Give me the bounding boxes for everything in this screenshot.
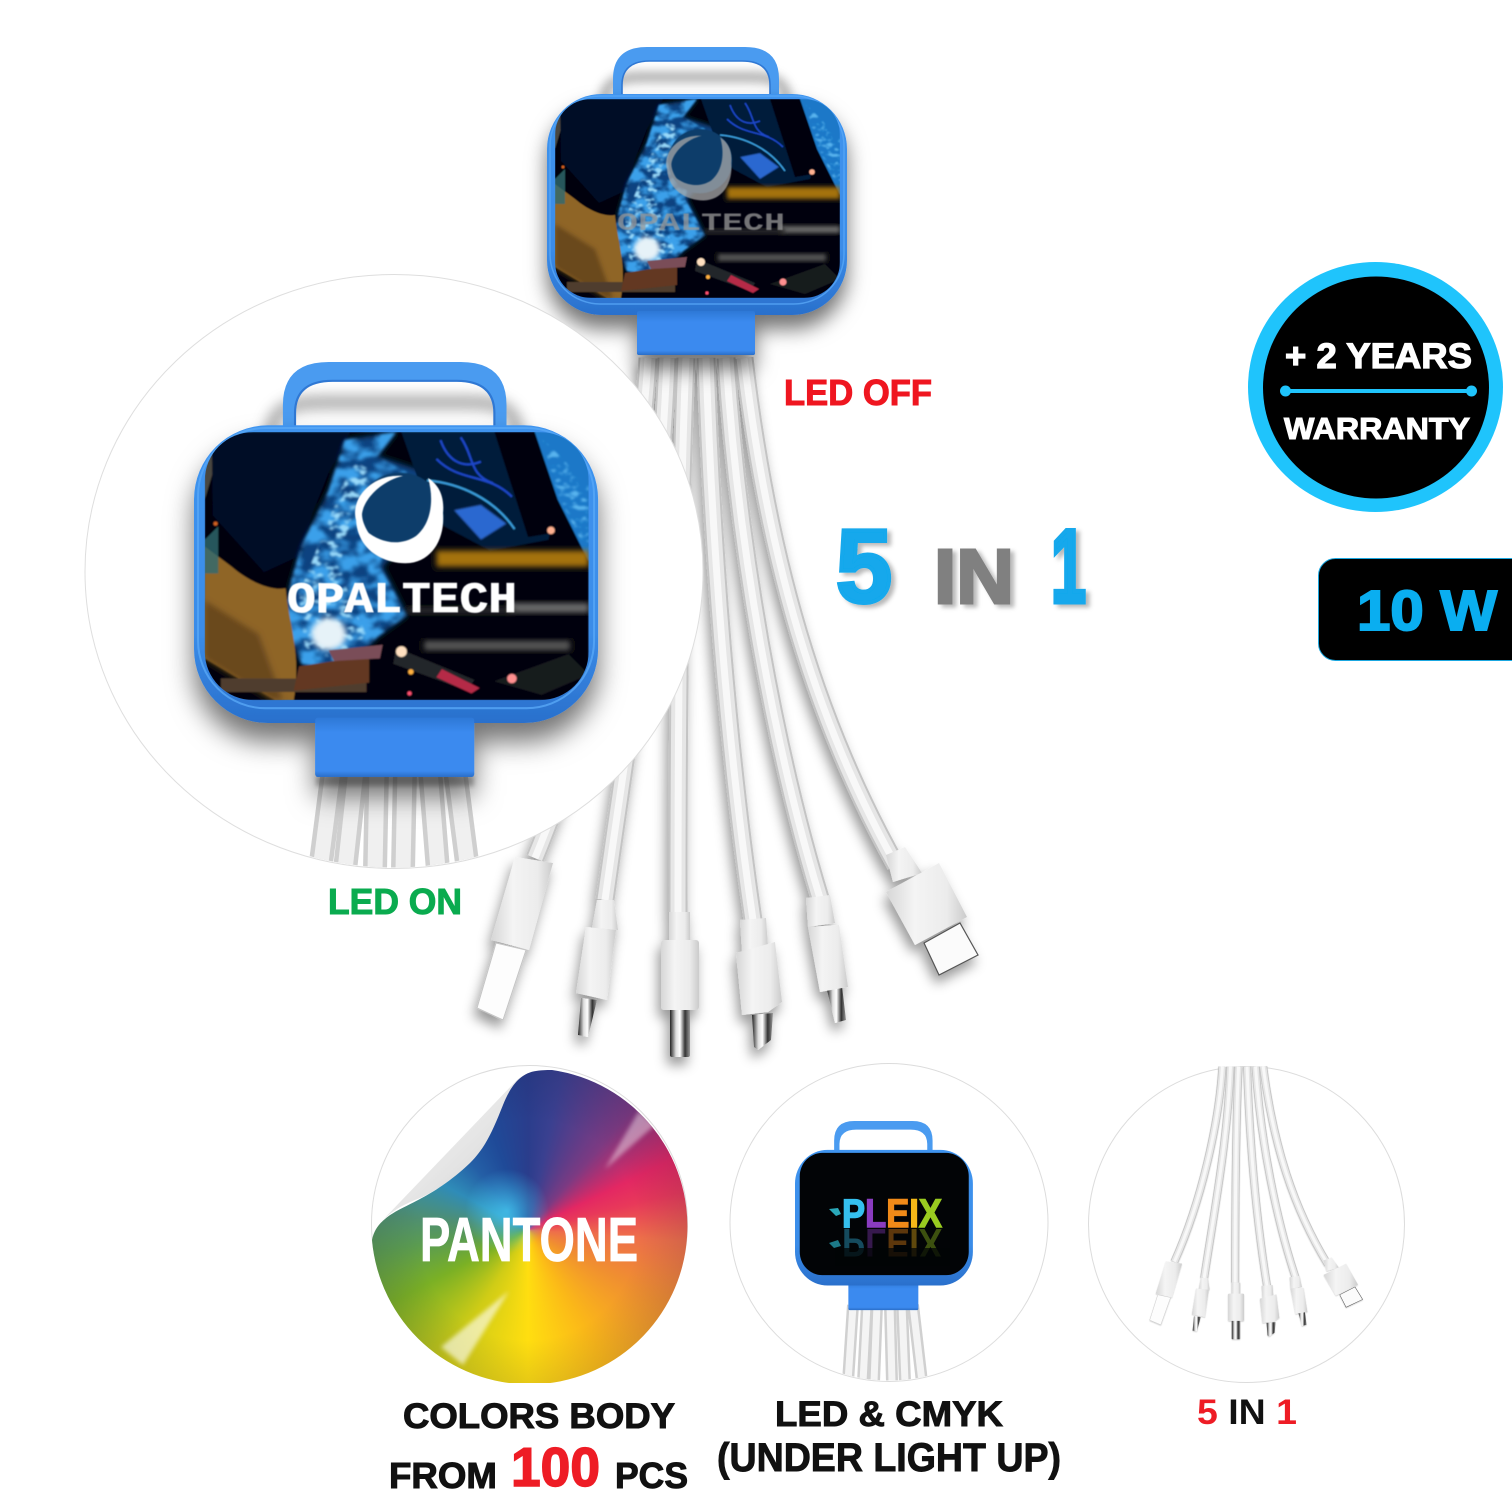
caption: colors body: PCS	[615, 1455, 688, 1496]
sticker: pantone color wheel	[371, 1065, 689, 1383]
caption: LED and CMYK: (UNDER LIGHT UP)	[717, 1436, 1061, 1480]
glint: upper right	[605, 1111, 655, 1169]
badge: 10 W	[1318, 558, 1512, 660]
cables: 5 in 1 miniature	[1150, 1067, 1363, 1339]
product: mini device with black screen	[795, 1121, 973, 1310]
label: LED off: LED OFF	[784, 372, 932, 413]
caption: colors body: COLORS BODY	[403, 1397, 675, 1436]
badge: 2 years warranty: + 2 YEARS	[1285, 337, 1472, 376]
logo: LED off: OPALTECH	[617, 209, 785, 238]
cables and connectors: main product	[477, 358, 978, 1057]
panel: LED on zoom circle	[85, 274, 703, 868]
panel: LED & CMYK circle	[730, 1064, 1048, 1382]
logo: PLEIX: PLEIX	[842, 1192, 942, 1236]
cables inside zoom circle	[316, 770, 474, 870]
caption: LED and CMYK: LED & CMYK	[775, 1395, 1003, 1434]
headline: 5 in 1: 1	[1051, 509, 1086, 625]
product: LED on device	[194, 362, 598, 777]
logo: LED off	[617, 136, 785, 238]
headline: 5 in 1	[836, 509, 1086, 625]
headline: 5 in 1: IN	[934, 534, 1014, 620]
headline: 5 in 1: 5	[836, 509, 892, 625]
caption: colors body	[389, 1397, 688, 1498]
caption: LED and CMYK	[717, 1395, 1061, 1480]
logo: PLEIX: PLEIX	[842, 1220, 942, 1264]
glint: lower left	[441, 1291, 509, 1365]
caption: colors body: FROM	[389, 1455, 497, 1496]
badge: 10 W: 10 W	[1357, 579, 1497, 643]
badge: 2 years warranty	[1248, 262, 1503, 512]
panel: pantone circle outline and peel	[372, 1066, 688, 1382]
label: LED on: LED ON	[328, 881, 462, 922]
logo: LED on: OPALTECH	[287, 576, 517, 626]
logo: LED on	[287, 476, 517, 626]
cables inside LED & CMYK circle	[848, 1305, 922, 1382]
caption: 5 in 1: 5 IN 1	[1197, 1393, 1297, 1432]
logo: PLEIX	[829, 1192, 950, 1266]
badge: 2 years warranty: WARRANTY	[1284, 411, 1470, 446]
product: LED off device	[547, 47, 847, 355]
panel: 5 in 1 circle	[1088, 1066, 1404, 1382]
caption: colors body: 100	[511, 1436, 600, 1498]
